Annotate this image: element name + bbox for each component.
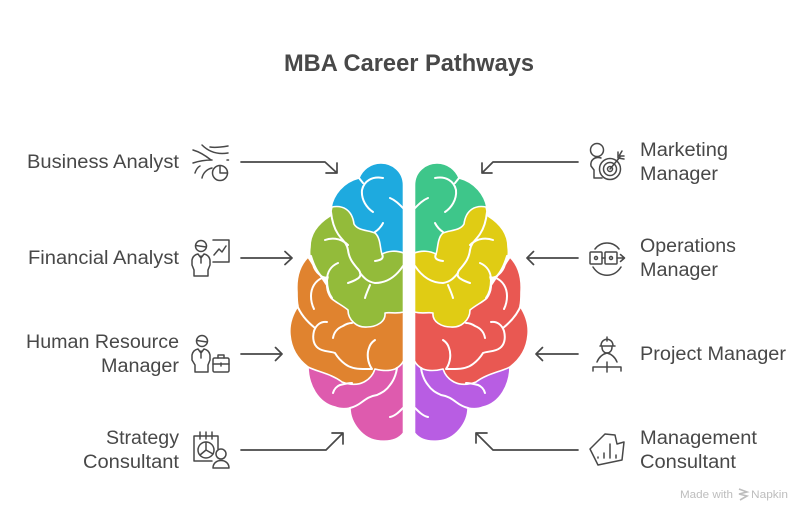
lobe: orange [290,257,404,384]
lobe: yellow [414,207,508,327]
footer: made with Napkin: Made with [680,489,733,501]
label: Operations Manager: Manager [640,260,719,281]
fold lines left [359,178,403,232]
label: Strategy Consultant [83,428,180,473]
label: Management Consultant: Consultant [640,452,737,473]
brain right hemisphere [414,163,528,441]
footer: made with Napkin [680,489,788,501]
label: Operations Manager: Operations [640,236,736,257]
arrow: management consultant [476,433,578,450]
arrow: strategy consultant [241,433,343,450]
icon: human resource manager [192,336,229,372]
label: Strategy Consultant: Strategy [106,428,180,449]
label: Human Resource Manager: Human Resource [26,332,179,353]
label: Marketing Manager: Manager [640,164,719,185]
label: Financial Analyst: Financial Analyst [28,248,180,269]
icon: marketing manager [590,144,624,180]
brain left hemisphere [290,163,404,441]
label: Marketing Manager [640,140,728,185]
arrow: human resource manager [241,348,282,360]
label: Strategy Consultant: Consultant [83,452,180,473]
label: Project Manager: Project Manager [640,344,787,365]
lobe: red [414,257,528,384]
label: Business Analyst: Business Analyst [27,152,180,173]
lobe: purple [414,350,510,441]
arrow: marketing manager [482,162,578,173]
label: Management Consultant [640,428,758,473]
icon: project manager [593,337,621,372]
arrow: financial analyst [241,252,292,264]
icon: strategy consultant [194,432,229,468]
fold lines right [415,178,459,232]
label: Marketing Manager: Marketing [640,140,728,161]
lobe: pink [308,350,404,441]
icon: business analyst [193,145,228,180]
label: Human Resource Manager: Manager [101,356,180,377]
icon: management consultant [590,434,624,465]
arrow: business analyst [241,162,337,173]
label: Operations Manager [640,236,736,281]
label: Human Resource Manager [26,332,180,377]
arrow: operations manager [527,252,578,264]
arrow: project manager [536,348,578,360]
lobe: green [414,163,487,260]
brain illustration [290,163,528,441]
lobe: olive [310,207,404,327]
title: MBA Career Pathways [284,50,534,77]
icon: financial analyst [192,240,229,276]
icon: operations manager [590,243,624,275]
footer: made with Napkin: Napkin [751,489,788,501]
label: Management Consultant: Management [640,428,758,449]
lobe: blue [331,163,404,260]
